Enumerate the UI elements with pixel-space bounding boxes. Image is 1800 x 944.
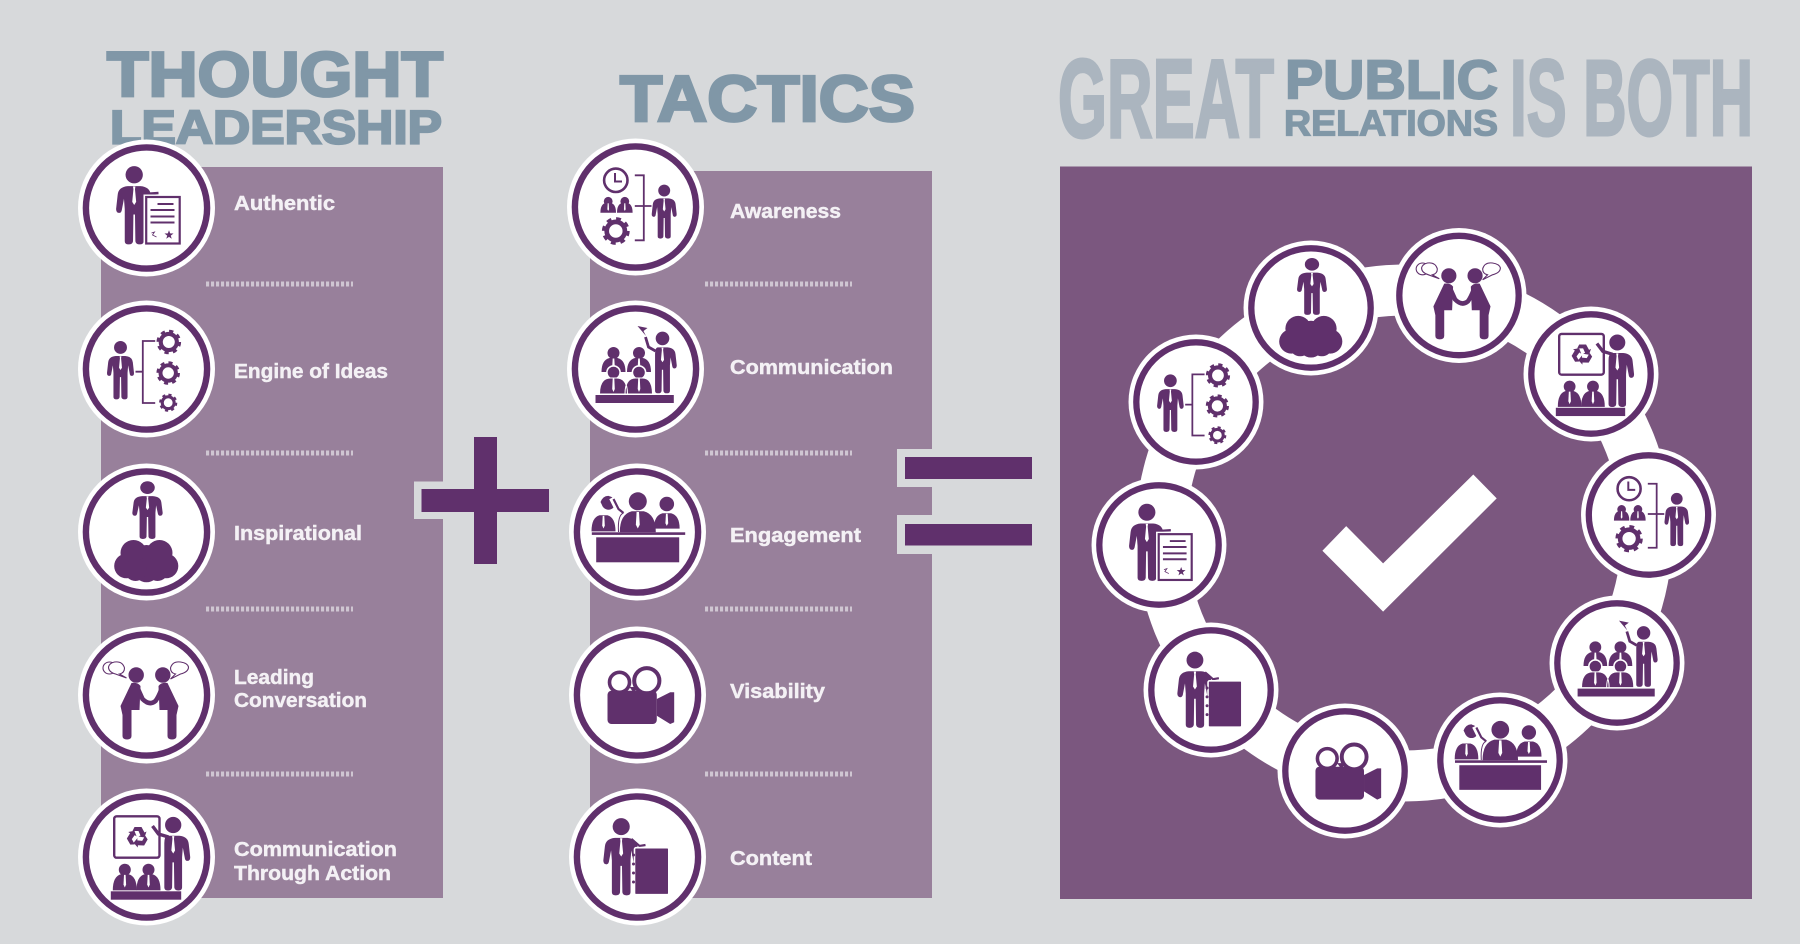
title: tactics: TACTICS — [620, 62, 915, 135]
dividers — [705, 284, 852, 774]
title: thought leadership — [107, 40, 443, 154]
item: Awareness: Awareness — [730, 201, 841, 223]
title: great public relations is both: GREAT — [1058, 37, 1274, 161]
item: Leading Conversation — [78, 626, 367, 764]
item: Engine of Ideas: Engine of Ideas — [234, 361, 388, 383]
item: Communication: Communication — [730, 357, 893, 379]
ring icon: engagement — [1433, 693, 1567, 827]
dividers — [206, 284, 353, 774]
item: Engine of Ideas — [78, 300, 388, 438]
item: Communication Through Action: Through Action — [234, 863, 391, 885]
item: Communication Through Action — [78, 788, 397, 926]
panel background — [1060, 166, 1752, 899]
panel: result — [1060, 166, 1752, 899]
item: Content — [569, 788, 812, 926]
item: Inspirational — [78, 464, 362, 600]
item: Engagement — [569, 464, 861, 600]
check mark — [1322, 474, 1497, 612]
ring icon: content — [1144, 623, 1278, 757]
ring icon: leading conversation — [1392, 228, 1526, 363]
panel background — [101, 167, 443, 898]
item: Communication Through Action: Communication — [234, 839, 397, 861]
panel: thought leadership — [78, 140, 443, 926]
plus sign — [414, 437, 549, 564]
item: Awareness — [567, 138, 841, 276]
panel: tactics — [567, 138, 932, 926]
white ring — [1161, 290, 1647, 776]
item: Authentic — [78, 140, 335, 276]
item: Leading Conversation: Leading — [234, 667, 314, 689]
item: Authentic: Authentic — [234, 193, 335, 215]
ring icon: visability — [1278, 704, 1412, 838]
ring icon: awareness — [1581, 448, 1716, 582]
panel background — [590, 171, 932, 898]
ring icon: communication — [1550, 596, 1684, 730]
title: great public relations is both: RELATIONS — [1284, 102, 1498, 144]
equals sign — [897, 449, 1032, 554]
title: great public relations is both: PUBLIC — [1285, 48, 1498, 110]
item: Content: Content — [730, 848, 812, 870]
ring icon: authentic — [1092, 478, 1226, 612]
ring icon: communication through action — [1524, 307, 1658, 441]
item: Leading Conversation: Conversation — [234, 690, 367, 712]
title: great public relations is both — [1058, 37, 1753, 161]
item: Engagement: Engagement — [730, 525, 861, 547]
ring icon: engine of ideas — [1129, 335, 1263, 469]
item: Inspirational: Inspirational — [234, 523, 362, 545]
item: Visability: Visability — [730, 681, 826, 703]
ring icon: inspirational — [1244, 241, 1378, 375]
item: Communication — [567, 300, 893, 438]
item: Visability — [569, 626, 826, 764]
title: thought leadership: LEADERSHIP — [110, 100, 442, 154]
title: thought leadership: THOUGHT — [107, 40, 443, 110]
